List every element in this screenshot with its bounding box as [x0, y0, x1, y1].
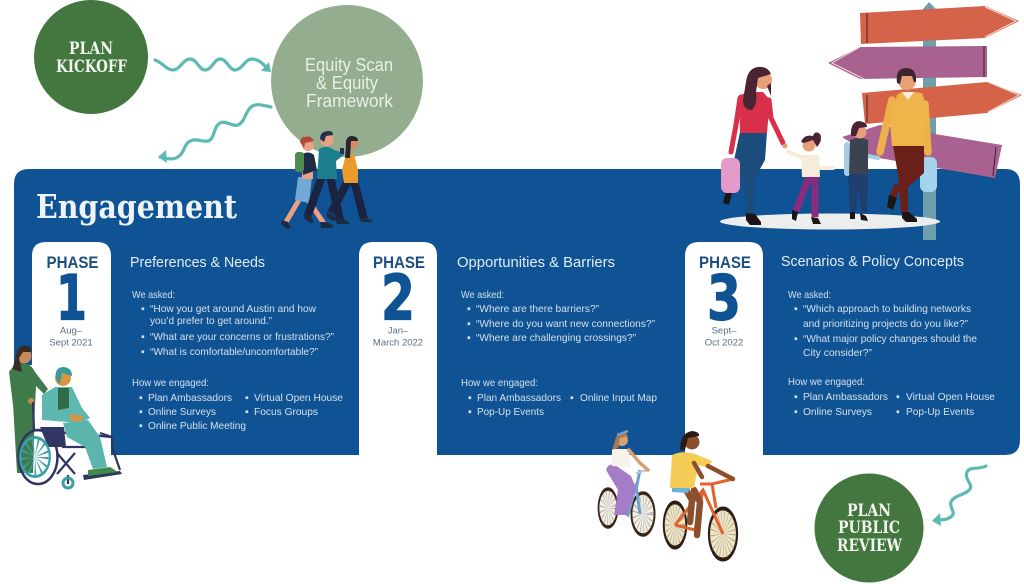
man with phone [304, 131, 349, 224]
seat [40, 427, 66, 447]
phase 3 label [699, 254, 751, 348]
phase 2 label [373, 254, 425, 348]
phase 3 content: Pop-Up Events [906, 406, 974, 418]
phase 3 label: Oct 2022 [705, 338, 743, 348]
man in yellow [880, 68, 937, 222]
phase 2 content [457, 254, 657, 418]
phase 3 content: Plan Ambassadors [803, 391, 888, 403]
phase 3 content: ▪ [896, 406, 900, 418]
phase 1 content [130, 254, 343, 432]
circle: equity scan and equity framework [271, 5, 423, 157]
boy [847, 121, 878, 221]
phase 1 content: Online Public Meeting [148, 420, 246, 432]
circle: equity scan and equity framework: Equity Scan [305, 55, 393, 75]
arrow: kickoff to equity scan [155, 59, 271, 72]
phase 1 content: “How you get around Austin and how [150, 303, 316, 315]
phase 3 content [781, 253, 995, 418]
phase 2 label: Jan– [388, 326, 409, 336]
phase 1 content: ▪ [139, 406, 143, 418]
phase 3 content: ▪ [794, 303, 798, 315]
caster wheel [63, 478, 73, 488]
phase 3 content: Scenarios & Policy Concepts [781, 253, 964, 270]
phase 3 label: 3 [707, 262, 741, 334]
phase 1 content: ▪ [245, 406, 249, 418]
phase 1 label: PHASE [46, 254, 98, 272]
front cyclist [664, 431, 737, 560]
phase 2 content: How we engaged: [461, 377, 538, 389]
illustration: nurse and wheelchair [9, 346, 122, 488]
circle: plan kickoff: PLAN [69, 39, 113, 59]
phase 3 content: How we engaged: [788, 376, 865, 388]
phase 3 content: ▪ [794, 391, 798, 403]
circle: plan public review: PUBLIC [838, 518, 900, 538]
patient [42, 367, 118, 476]
illustration: three people walking [281, 131, 372, 229]
phase 1 content: ▪ [139, 392, 143, 404]
phase 1 content: ▪ [141, 331, 145, 343]
phase 2 label: 2 [381, 262, 415, 334]
phase 1 content: “What are your concerns or frustrations?” [150, 331, 334, 343]
phase 2 content: ▪ [467, 303, 471, 315]
phase 2 content: ▪ [468, 392, 472, 404]
heading: engagement: Engagement [36, 187, 238, 226]
phase 2 content: “Where do you want new connections?” [476, 318, 655, 330]
panel: engagement background [14, 169, 1020, 460]
ground ellipse [720, 214, 940, 230]
illustration: family walking [720, 67, 940, 230]
woman with orange bag [327, 136, 372, 222]
arrow: to plan public review [932, 466, 986, 526]
phase 3 label: Sept– [712, 326, 737, 336]
phase 1 content: “What is comfortable/uncomfortable?” [150, 346, 318, 358]
circle: equity scan and equity framework: & Equity [316, 73, 378, 93]
phase 3 content: “What major policy changes should the [803, 333, 977, 345]
phase 1 content: We asked: [132, 289, 175, 301]
phase 3 content: ▪ [794, 333, 798, 345]
phase 1 label: 1 [56, 262, 87, 334]
phase 2 label: March 2022 [373, 338, 423, 348]
phase 2 content: ▪ [468, 406, 472, 418]
phase 1 content: Plan Ambassadors [148, 392, 232, 404]
phase 2 content: Opportunities & Barriers [457, 254, 615, 271]
woman with backpack [281, 136, 333, 229]
phase 2 content: ▪ [570, 392, 574, 404]
phase 2 tab [359, 242, 437, 460]
big wheel [18, 430, 58, 484]
phase 3 content: “Which approach to building networks [803, 303, 971, 315]
phase 2 content: ▪ [467, 332, 471, 344]
phase 2 content: Plan Ambassadors [477, 392, 561, 404]
phase 2 content: ▪ [467, 318, 471, 330]
phase 2 content: Pop-Up Events [477, 406, 544, 418]
rear cyclist [598, 431, 655, 535]
phase 1 content: ▪ [139, 420, 143, 432]
footplate [83, 471, 122, 480]
phase 2 content: Online Input Map [580, 392, 657, 404]
phase 1 content: ▪ [245, 392, 249, 404]
phase 1 content: How we engaged: [132, 377, 209, 389]
phase 3 content: Virtual Open House [906, 391, 995, 403]
phase 1 content: ▪ [141, 303, 145, 315]
phase 1 tab [32, 242, 111, 460]
sign third right [862, 82, 1022, 124]
phase 1 label: Sept 2021 [49, 338, 93, 348]
phase 3 content: ▪ [794, 406, 798, 418]
phase 3 content: and prioritizing projects do you like?” [803, 318, 968, 330]
arrow: equity scan to engagement [158, 105, 271, 163]
phase 1 content: Online Surveys [148, 406, 216, 418]
phase 3 content: We asked: [788, 289, 831, 301]
phase 1 content: ▪ [141, 346, 145, 358]
illustration: two cyclists [598, 431, 737, 560]
phase 2 content: “Where are challenging crossings?” [476, 332, 636, 344]
nurse [9, 346, 48, 473]
woman in red [721, 67, 788, 225]
circle: equity scan and equity framework: Framework [306, 91, 394, 111]
phase 1 content: Focus Groups [254, 406, 318, 418]
phase 1 label [46, 254, 98, 348]
phase 2 content: We asked: [461, 289, 504, 301]
circle: plan kickoff: KICKOFF [56, 57, 127, 77]
sign second left [828, 46, 987, 79]
girl [788, 132, 833, 224]
sign bottom [842, 125, 1002, 178]
phase 1 label: Aug– [60, 326, 83, 336]
phase 3 content: Online Surveys [803, 406, 872, 418]
phase 3 label: PHASE [699, 254, 751, 272]
illustration: signpost [828, 2, 1022, 240]
circle: plan public review: PLAN [847, 501, 891, 521]
phase 3 tab [685, 242, 763, 460]
circle: plan public review [814, 474, 924, 582]
post [923, 2, 936, 240]
wheelchair frame [33, 402, 120, 484]
phase 3 content: ▪ [896, 391, 900, 403]
phase 1 content: you’d prefer to get around.” [150, 315, 272, 327]
phase 3 content: City consider?” [803, 347, 872, 359]
phase 1 content: Virtual Open House [254, 392, 343, 404]
phase 2 label: PHASE [373, 254, 425, 272]
sign top right [860, 6, 1019, 44]
circle: plan kickoff [34, 0, 148, 114]
phase 2 content: “Where are there barriers?” [476, 303, 599, 315]
phase 1 content: Preferences & Needs [130, 254, 265, 271]
circle: plan public review: REVIEW [837, 536, 903, 556]
